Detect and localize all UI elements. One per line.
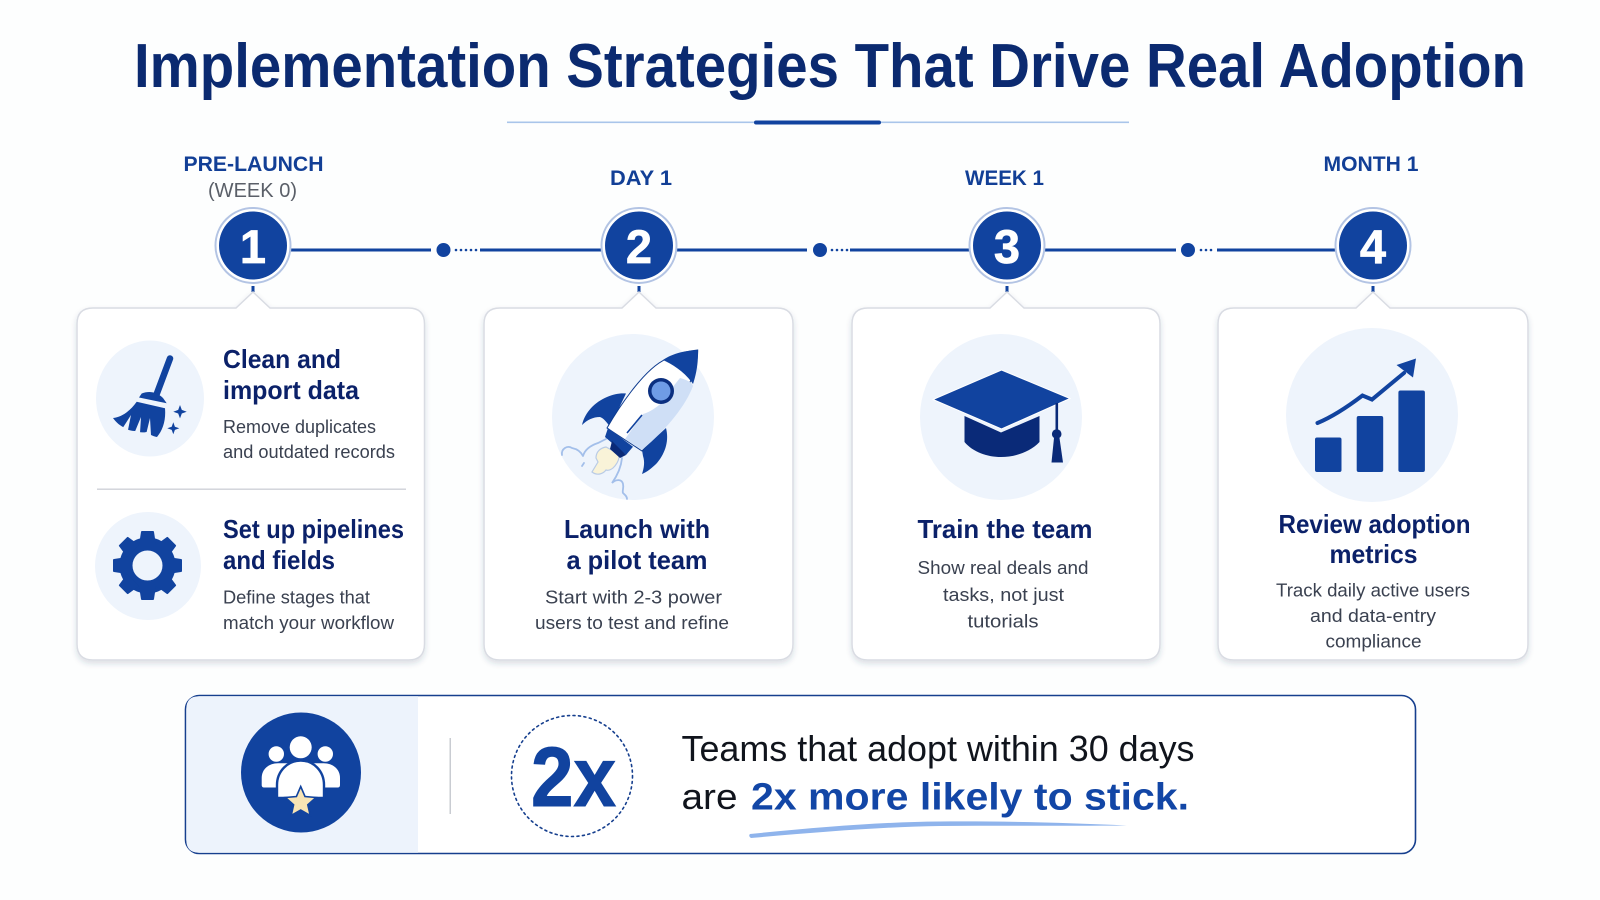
callout panel [186, 696, 1416, 854]
stat: 2x: 2x [531, 730, 616, 824]
text: start with power users [535, 586, 729, 633]
step 3 badge: 3 [994, 220, 1020, 273]
step 2 badge [602, 208, 676, 292]
heading: launch with a pilot team: a pilot team [566, 545, 708, 575]
text: start with power users: Start with 2-3 power [545, 586, 722, 608]
step 4 badge: 4 [1360, 220, 1386, 273]
step 1 badge: 1 [240, 220, 266, 273]
step 2 label: DAY 1 [610, 167, 672, 190]
text: track daily active users: and data-entry [1310, 605, 1437, 626]
text: define stages [223, 586, 395, 633]
heading: set up pipelines and fields [223, 514, 404, 575]
heading: train the team: Train the team [918, 514, 1092, 544]
panel: month 1 card [1218, 292, 1528, 660]
step 1 badge [216, 208, 290, 292]
text: define stages: match your workflow [223, 612, 395, 633]
step 4 badge [1336, 208, 1410, 292]
callout text: 2x more likely to stick. [751, 776, 1189, 818]
title underline [507, 120, 1129, 124]
text: define stages: Define stages that [223, 586, 370, 608]
heading: review adoption metrics: Review adoption [1278, 509, 1470, 539]
icon: broom [96, 340, 204, 456]
text: show real deals: tasks, not just [943, 584, 1064, 605]
icon: rocket [552, 334, 714, 500]
step 2 badge: 2 [626, 220, 652, 273]
panel: week 1 card [852, 292, 1160, 660]
step 1 label [184, 153, 324, 202]
text: remove duplicates: and outdated records [223, 441, 395, 462]
heading: review adoption metrics: metrics [1330, 539, 1418, 569]
step 1 label: (WEEK 0) [208, 179, 297, 202]
heading: clean and import data: import data [223, 375, 360, 405]
text: show real deals: tutorials [968, 610, 1038, 632]
timeline connectors [290, 243, 1337, 257]
icon: team with star [241, 712, 361, 832]
panel: day 1 card [484, 292, 793, 660]
heading: set up pipelines and fields: and fields [223, 545, 335, 575]
step 3 label: WEEK 1 [965, 167, 1044, 190]
callout text: Teams that adopt within 30 days [682, 728, 1194, 769]
panel: pre-launch card [77, 292, 424, 660]
step 4 label: MONTH 1 [1324, 153, 1419, 176]
step 1 label: PRE-LAUNCH [184, 153, 324, 176]
text: show real deals: Show real deals and [918, 557, 1088, 578]
heading: launch with a pilot team [564, 514, 710, 575]
heading: clean and import data [223, 344, 360, 405]
icon: gear [95, 512, 201, 620]
callout text [682, 728, 1194, 838]
text: remove duplicates: Remove duplicates [223, 416, 376, 437]
heading: set up pipelines and fields: Set up pipelines [223, 514, 404, 544]
text: start with power users: users to test and refine [535, 612, 729, 633]
callout text: are [682, 776, 738, 817]
icon: graduation cap [920, 334, 1082, 500]
icon: bar chart with arrow [1286, 328, 1458, 502]
text: track daily active users [1276, 580, 1470, 652]
text: track daily active users: compliance [1326, 630, 1422, 652]
text: track daily active users: Track daily active users [1276, 580, 1470, 600]
step 3 badge [970, 208, 1044, 292]
heading: clean and import data: Clean and [223, 344, 341, 374]
heading: review adoption metrics [1278, 509, 1470, 569]
stat: 2x [512, 716, 632, 836]
text: show real deals [918, 557, 1088, 632]
heading: launch with a pilot team: Launch with [564, 514, 710, 544]
text: remove duplicates [223, 416, 395, 462]
